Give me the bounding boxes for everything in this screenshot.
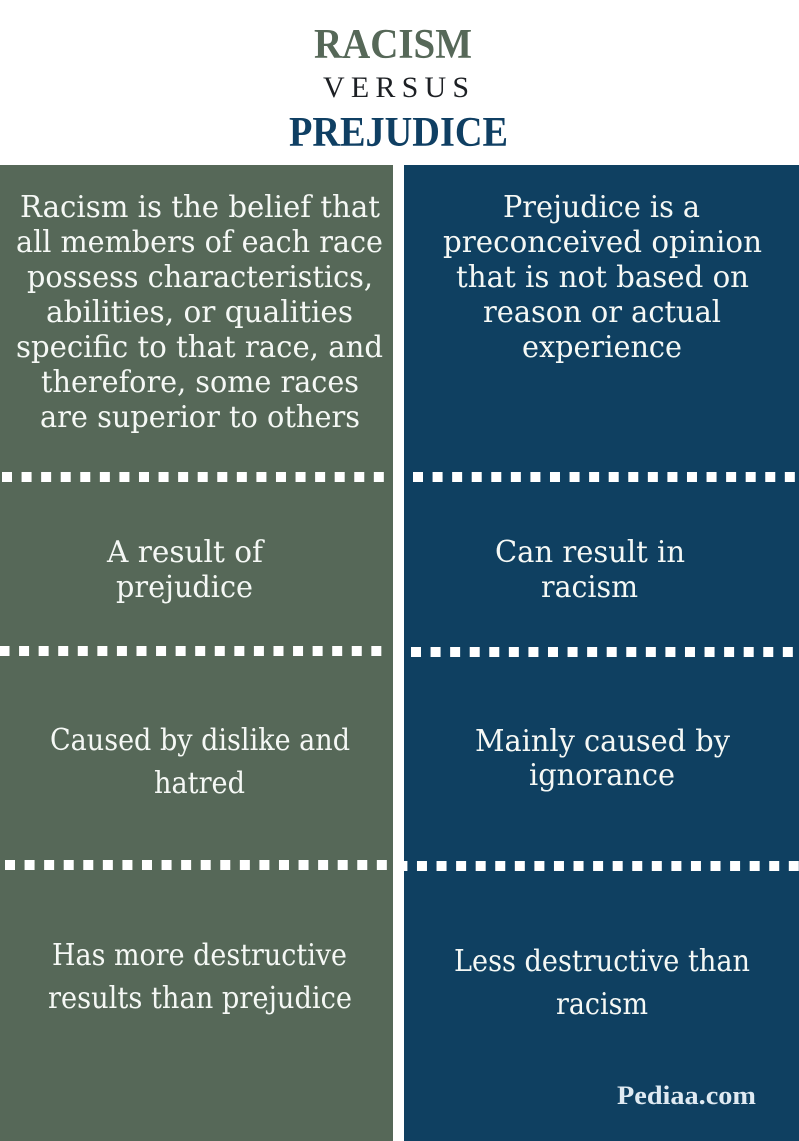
definition of racism: all members of each race (16, 225, 383, 260)
relation of prejudice to racism: racism (541, 570, 638, 605)
cause of prejudice: ignorance (529, 758, 675, 793)
relation of racism to prejudice (106, 535, 265, 605)
cause of prejudice: Mainly caused by (475, 724, 730, 759)
relation of prejudice to racism: Can result in (495, 535, 685, 570)
definition of prejudice: preconceived opinion (443, 225, 762, 260)
relation of prejudice to racism (495, 535, 685, 605)
relation of racism to prejudice: A result of (106, 535, 265, 570)
definition of racism: specific to that race, and (16, 330, 383, 365)
relation of racism to prejudice: prejudice (116, 570, 253, 605)
definition of racism (16, 190, 383, 435)
effects of racism: Has more destructive (52, 938, 347, 973)
definition of prejudice: Prejudice is a (503, 190, 700, 225)
title: racism versus prejudice (289, 22, 508, 156)
definition of racism: Racism is the belief that (20, 190, 380, 225)
effects of racism: results than prejudice (48, 981, 352, 1016)
title: racism versus prejudice: RACISM (314, 22, 472, 68)
panel: prejudice column (397, 165, 799, 1141)
logo: Pediaa.com: Pediaa.com (617, 1081, 756, 1110)
cause of racism: Caused by dislike and (50, 723, 350, 758)
cause of racism (50, 723, 350, 801)
effects of prejudice (454, 944, 750, 1022)
cause of racism: hatred (154, 766, 245, 801)
definition of prejudice: that is not based on (456, 260, 749, 295)
effects of prejudice: racism (556, 987, 648, 1022)
definition of prejudice: experience (522, 330, 682, 365)
title: racism versus prejudice: PREJUDICE (289, 110, 508, 156)
definition of racism: abilities, or qualities (46, 295, 353, 330)
effects of prejudice: Less destructive than (454, 944, 750, 979)
definition of racism: therefore, some races (41, 365, 359, 400)
effects of racism (48, 938, 352, 1016)
definition of racism: are superior to others (40, 400, 360, 435)
cause of prejudice (475, 724, 730, 793)
definition of prejudice: reason or actual (483, 295, 721, 330)
panel: racism column (0, 165, 393, 1141)
title: racism versus prejudice: VERSUS (323, 71, 469, 104)
definition of prejudice (443, 190, 762, 365)
definition of racism: possess characteristics, (27, 260, 373, 295)
